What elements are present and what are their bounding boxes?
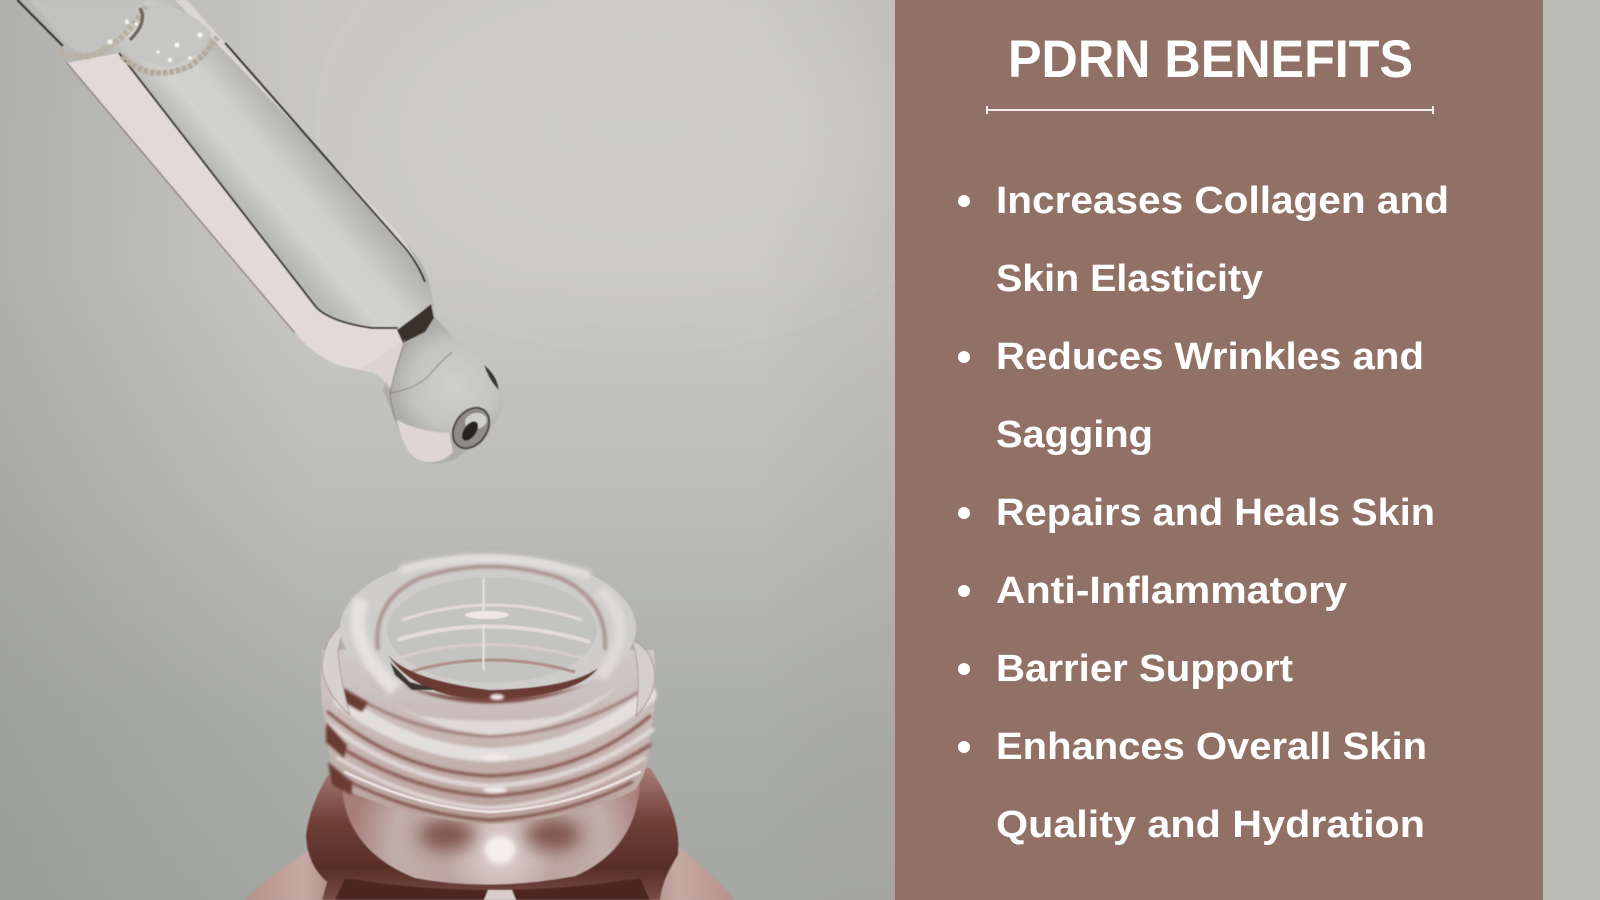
lower bottle shoulder	[245, 842, 735, 900]
dark inner line left	[119, 53, 398, 328]
warm reflection under lip	[400, 685, 585, 704]
neck dark reflections	[419, 820, 581, 863]
lip outer flange right	[632, 640, 655, 716]
bottle lip	[340, 554, 636, 702]
panel: PDRN benefits	[895, 0, 1543, 900]
image: pink glass serum bottle	[245, 554, 735, 900]
lip outer flange left	[322, 622, 350, 715]
right edge strip	[1543, 0, 1600, 900]
pinkish ring inside the lip	[377, 566, 605, 650]
benefit: wrinkles and sagging: Reduces Wrinkles and	[996, 336, 1424, 378]
outer clear edge	[175, 0, 428, 285]
top left dark line	[18, 0, 63, 46]
neck interior with highlight	[342, 785, 640, 885]
threaded neck	[321, 650, 655, 824]
panel: photo background	[0, 0, 895, 900]
benefit: skin quality and hydration: Enhances Overall Skin	[996, 726, 1427, 768]
outer left edge line	[67, 63, 295, 333]
pink neck reflection	[360, 338, 405, 390]
dark inner line right	[225, 43, 425, 282]
benefit: repairs and heals: Repairs and Heals Skin	[996, 492, 1435, 534]
center glints on threads	[481, 694, 509, 793]
dark neck highlight	[397, 304, 434, 343]
lip dark accent	[390, 662, 440, 690]
benefit: collagen and elasticity: Skin Elasticity	[996, 258, 1263, 300]
benefit: wrinkles and sagging: Sagging	[996, 414, 1153, 456]
benefit: barrier support: Barrier Support	[996, 648, 1293, 690]
panel background	[895, 0, 1543, 900]
dark lip inner shadow	[388, 655, 598, 701]
thread arcs	[328, 688, 652, 820]
lip frosted front	[360, 680, 625, 735]
benefit: collagen and elasticity	[958, 180, 1449, 300]
air bubble meniscus arcs	[60, 4, 217, 73]
title underline	[987, 106, 1433, 114]
dark collar ring	[306, 768, 678, 900]
droplet opening ring	[445, 401, 497, 455]
bulb right shadow	[484, 365, 499, 390]
dropper glass tube	[18, 0, 435, 367]
upper tube section above meniscus	[30, 0, 146, 54]
dark thread chunks at left	[326, 688, 368, 795]
benefit: anti-inflammatory: Anti-Inflammatory	[996, 570, 1347, 612]
bottle opening	[387, 577, 597, 683]
title: PDRN BENEFITS	[1008, 30, 1413, 89]
frosted lip highlights	[358, 559, 620, 690]
image: glass dropper with droplet	[18, 0, 503, 464]
benefit: skin quality and hydration	[958, 726, 1427, 846]
lower neck ring with reflections	[335, 878, 650, 900]
benefit: collagen and elasticity: Increases Collagen and	[996, 180, 1449, 222]
pink lower reflection	[397, 420, 453, 462]
dropper bulb tip	[383, 317, 503, 464]
benefit: skin quality and hydration: Quality and Hydration	[996, 804, 1425, 846]
benefit: wrinkles and sagging	[958, 336, 1424, 456]
pink reflected band	[67, 53, 405, 390]
bulb contour lines	[390, 340, 452, 420]
